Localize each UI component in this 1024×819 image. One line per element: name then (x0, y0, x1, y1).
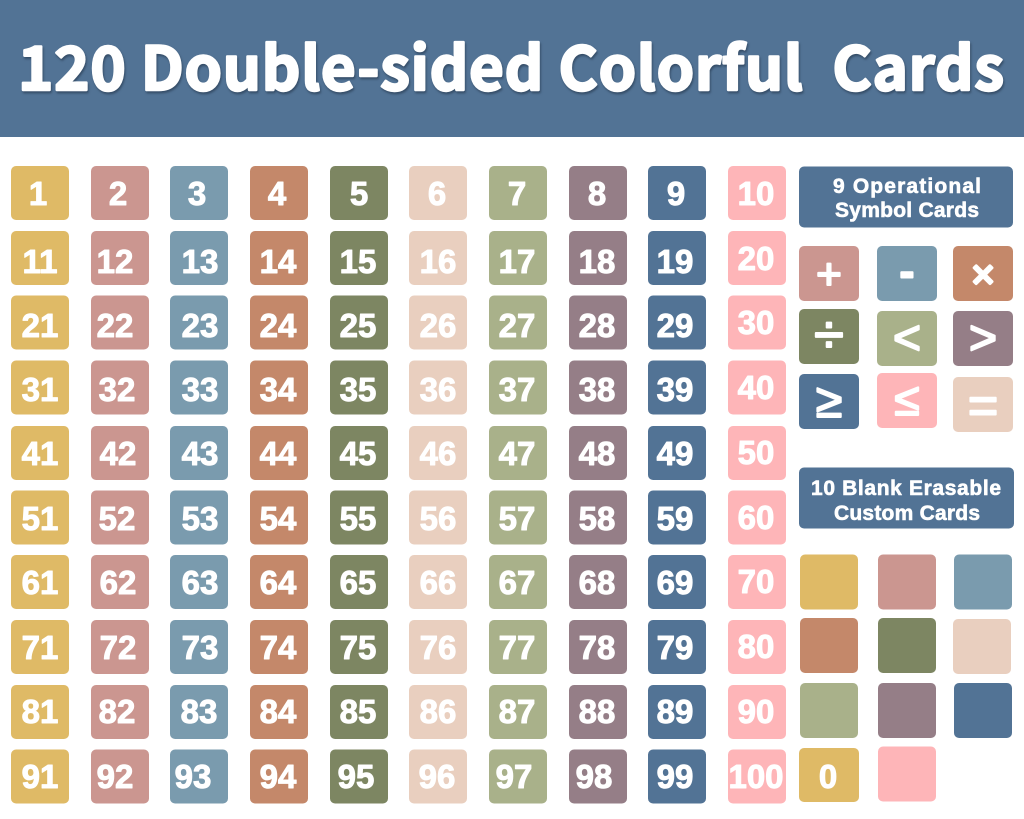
blank card: blue (954, 683, 1012, 738)
column 1 yellow cards: 31 (22, 371, 58, 408)
column 6 peach cards: 26 (420, 307, 456, 344)
column 10 pink cards: 90 (738, 693, 774, 730)
panel: blank custom cards (799, 554, 1012, 802)
column 1 yellow cards: 1 (29, 175, 47, 212)
column 2 rose cards (91, 166, 149, 804)
column 9 blue cards: 19 (657, 243, 693, 280)
column 9 blue cards: 99 (657, 758, 693, 795)
column 9 blue cards: 79 (657, 629, 693, 666)
column 4 terracotta cards: 44 (260, 435, 297, 472)
blank card: teal (954, 554, 1012, 610)
column 4 terracotta cards: 84 (260, 693, 297, 730)
column 7 sage cards: 7 (508, 175, 526, 212)
column 1 yellow cards: 81 (22, 693, 58, 730)
column 4 terracotta cards: 4 (268, 175, 287, 212)
title: 120 Double-sided Colorful Cards (18, 21, 1004, 108)
symbol card: less or equal: ≤ (894, 373, 920, 425)
column 5 olive cards (330, 166, 388, 804)
column 9 blue cards: 69 (657, 564, 693, 601)
column 7 sage cards: 27 (499, 307, 535, 344)
column 10 pink cards: 10 (738, 175, 774, 212)
column 2 rose cards: 92 (97, 758, 133, 795)
column 2 rose cards: 52 (99, 500, 135, 537)
column 8 mauve cards (569, 166, 627, 804)
symbol card: greater than: > (969, 312, 997, 365)
column 5 olive cards: 95 (338, 758, 374, 795)
heading: 10 blank erasable custom cards: Custom Cards (834, 502, 980, 525)
column 2 rose cards: 12 (97, 243, 133, 280)
blank card: terracotta (800, 618, 858, 673)
column 10 pink cards: 60 (738, 499, 774, 536)
column 9 blue cards: 49 (657, 435, 693, 472)
column 6 peach cards: 96 (419, 758, 455, 795)
column 2 rose cards: 2 (109, 175, 127, 212)
heading: 9 operational symbol cards (799, 166, 1013, 228)
column 10 pink cards: 50 (738, 434, 774, 471)
column 3 teal cards: 53 (182, 500, 218, 537)
column 10 pink cards (728, 166, 786, 804)
column 9 blue cards: 89 (657, 693, 693, 730)
column 4 terracotta cards: 24 (260, 307, 297, 344)
column 5 olive cards: 85 (340, 693, 376, 730)
column 3 teal cards: 43 (182, 435, 218, 472)
column 2 rose cards: 62 (100, 564, 136, 601)
column 10 pink cards: 70 (738, 563, 774, 600)
blank card: olive (878, 618, 936, 673)
column 4 terracotta cards (250, 166, 308, 804)
column 4 terracotta cards: 94 (260, 758, 297, 795)
column 10 pink cards: 40 (738, 369, 774, 406)
column 9 blue cards: 59 (657, 500, 693, 537)
column 7 sage cards: 37 (499, 371, 535, 408)
column 8 mauve cards: 48 (579, 435, 615, 472)
column 3 teal cards (170, 166, 228, 804)
column 2 rose cards: 32 (99, 371, 135, 408)
symbol card: less than: < (893, 312, 921, 365)
blank card: mauve (878, 683, 936, 738)
column 6 peach cards: 46 (420, 435, 456, 472)
column 7 sage cards: 97 (496, 758, 532, 795)
column 8 mauve cards: 68 (579, 564, 615, 601)
column 7 sage cards: 47 (499, 435, 535, 472)
symbol card: minus: - (900, 247, 914, 296)
column 6 peach cards: 66 (420, 564, 456, 601)
column 6 peach cards: 36 (420, 371, 456, 408)
column 8 mauve cards: 38 (579, 371, 615, 408)
blank card: sage (800, 683, 858, 738)
column 5 olive cards: 55 (340, 500, 376, 537)
column 4 terracotta cards: 64 (260, 564, 297, 601)
symbol card: plus: + (816, 250, 842, 299)
column 3 teal cards: 33 (182, 371, 218, 408)
column 1 yellow cards: 11 (23, 243, 57, 280)
column 5 olive cards: 35 (340, 371, 376, 408)
column 1 yellow cards (11, 166, 69, 804)
column 2 rose cards: 22 (97, 307, 133, 344)
blank card: peach (953, 619, 1011, 674)
column 8 mauve cards: 8 (588, 175, 606, 212)
column 3 teal cards: 23 (182, 307, 218, 344)
column 5 olive cards: 5 (350, 175, 368, 212)
column 7 sage cards (489, 166, 547, 804)
column 9 blue cards: 39 (657, 371, 693, 408)
column 3 teal cards: 63 (182, 564, 218, 601)
column 10 pink cards: 30 (738, 304, 774, 341)
column 4 terracotta cards: 54 (260, 500, 297, 537)
column 6 peach cards: 6 (428, 175, 446, 212)
column 1 yellow cards: 71 (22, 629, 58, 666)
panel: operational symbol cards (799, 246, 1013, 435)
symbol card: plus (799, 246, 859, 301)
column 5 olive cards: 75 (340, 629, 376, 666)
column 7 sage cards: 57 (499, 500, 535, 537)
column 8 mauve cards: 78 (579, 629, 615, 666)
column 5 olive cards: 45 (340, 435, 376, 472)
symbol card: multiply: × (971, 253, 995, 297)
blank card: yellow (800, 554, 858, 610)
column 4 terracotta cards: 74 (260, 629, 297, 666)
column 1 yellow cards: 21 (22, 307, 58, 344)
column 6 peach cards (409, 166, 467, 804)
column 8 mauve cards: 88 (579, 693, 615, 730)
column 4 terracotta cards: 14 (260, 243, 297, 280)
column 8 mauve cards: 28 (579, 307, 615, 344)
header banner (0, 0, 1024, 137)
symbol card: divide (799, 305, 859, 365)
column 7 sage cards: 67 (499, 564, 535, 601)
column 5 olive cards: 65 (340, 564, 376, 601)
column 8 mauve cards: 18 (579, 243, 615, 280)
symbol card: equals: = (968, 377, 998, 435)
symbol card: greater or equal (799, 374, 859, 429)
column 7 sage cards: 77 (499, 629, 535, 666)
column 1 yellow cards: 41 (22, 435, 58, 472)
heading: 9 operational symbol cards: 9 Operational (833, 175, 981, 198)
column 9 blue cards: 29 (657, 307, 693, 344)
symbol card: minus (877, 246, 937, 301)
column 7 sage cards: 17 (499, 243, 535, 280)
card: zero: 0 (819, 758, 837, 795)
column 1 yellow cards: 61 (22, 564, 58, 601)
card: zero (799, 748, 859, 802)
column 2 rose cards: 72 (100, 629, 136, 666)
symbol card: greater than (953, 311, 1013, 366)
column 6 peach cards: 86 (420, 693, 456, 730)
symbol card: divide: ÷ (814, 305, 844, 365)
column 3 teal cards: 3 (188, 175, 206, 212)
blank card: rose (878, 554, 936, 610)
column 3 teal cards: 73 (182, 629, 218, 666)
panel: number cards 1-100 (11, 166, 786, 804)
column 2 rose cards: 42 (100, 435, 136, 472)
column 6 peach cards: 76 (420, 629, 456, 666)
column 3 teal cards: 13 (182, 243, 218, 280)
symbol card: greater or equal: ≥ (816, 375, 842, 428)
column 3 teal cards: 83 (181, 693, 217, 730)
column 7 sage cards: 87 (499, 693, 535, 730)
column 2 rose cards: 82 (99, 693, 135, 730)
column 1 yellow cards: 91 (22, 758, 58, 795)
column 1 yellow cards: 51 (22, 500, 58, 537)
symbol card: less or equal (877, 373, 937, 428)
column 9 blue cards (648, 166, 706, 804)
symbol card: less than (877, 311, 937, 366)
column 5 olive cards: 25 (340, 307, 376, 344)
column 4 terracotta cards: 34 (260, 371, 297, 408)
blank card: pink (878, 746, 936, 802)
column 8 mauve cards: 98 (576, 758, 612, 795)
symbol card: multiply (953, 246, 1013, 301)
heading: 9 operational symbol cards: Symbol Cards (835, 199, 979, 222)
column 6 peach cards: 56 (420, 500, 456, 537)
column 5 olive cards: 15 (340, 243, 376, 280)
column 6 peach cards: 16 (420, 243, 456, 280)
symbol card: equals (953, 377, 1013, 435)
heading: 10 blank erasable custom cards: 10 Blank Erasable (811, 477, 1001, 500)
column 10 pink cards: 80 (738, 628, 774, 665)
column 8 mauve cards: 58 (579, 500, 615, 537)
heading: 10 blank erasable custom cards (799, 468, 1014, 528)
column 10 pink cards: 100 (728, 758, 784, 795)
column 9 blue cards: 9 (667, 175, 685, 212)
column 3 teal cards: 93 (175, 758, 211, 795)
column 10 pink cards: 20 (738, 240, 774, 277)
